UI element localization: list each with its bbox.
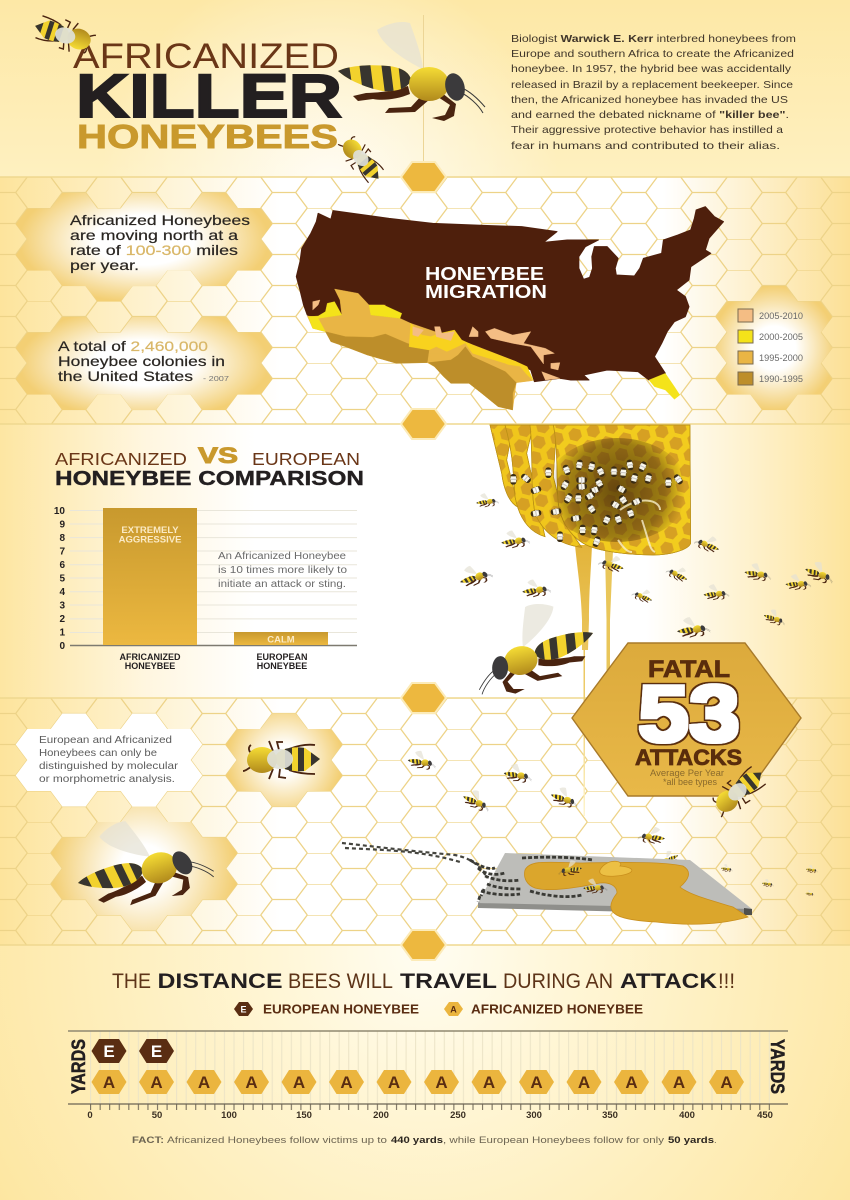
panel: distinguishing text: European and Africanized xyxy=(39,734,172,746)
icon: large bee near comb xyxy=(463,592,604,701)
intro paragraph: and earned the debated nickname of "killer bee" . xyxy=(511,109,789,121)
panel: migration rate callout xyxy=(16,193,272,302)
fact line: , while European Honeybees follow for only xyxy=(443,1135,664,1146)
swarm of small flying bees xyxy=(407,490,836,896)
chart: yards travelled: A xyxy=(625,1073,638,1092)
axis title right: YARDS xyxy=(766,1039,787,1094)
category labels: AFRICANIZED xyxy=(120,652,181,662)
intro paragraph: Biologist Warwick E. Kerr interbred honeybees from xyxy=(511,33,796,45)
intro paragraph: Their aggressive protective behavior has instilled a xyxy=(511,124,783,136)
map: honeybee migration xyxy=(296,207,723,410)
callout: fatal attacks hexagon: FATAL xyxy=(648,656,730,683)
intro paragraph: released in Brazil by a replacement beekeeper. Since xyxy=(511,79,793,91)
bar chart: aggression comparison: 6 xyxy=(59,560,65,571)
axis labels: 350 xyxy=(602,1110,618,1121)
fact line: 440 yards xyxy=(391,1135,443,1146)
category labels: HONEYBEE xyxy=(257,661,307,671)
chart: yards travelled: A xyxy=(245,1073,258,1092)
heading: distance bees travel: TRAVEL xyxy=(400,970,497,993)
chart: yards travelled: A xyxy=(388,1073,400,1092)
panel: colonies callout xyxy=(16,317,272,410)
heading: distance bees travel xyxy=(112,970,735,993)
icon: top-view bee above title xyxy=(30,11,98,58)
legend: bee types: E xyxy=(240,1004,247,1014)
map: honeybee migration: MIGRATION xyxy=(425,282,547,302)
heading: distance bees travel: DISTANCE xyxy=(158,970,282,993)
panel: top-view bee hexagon xyxy=(226,714,342,806)
chart: yards travelled: E xyxy=(151,1042,162,1061)
legend: bee types: A xyxy=(450,1004,457,1014)
heading: comparison: EUROPEAN xyxy=(252,449,360,469)
heading: distance bees travel: BEES WILL xyxy=(288,970,393,993)
legend: bee types: EUROPEAN HONEYBEE xyxy=(263,1002,419,1016)
heading: comparison: AFRICANIZED xyxy=(55,449,187,469)
map: honeybee migration: HONEYBEE xyxy=(425,264,544,284)
bar chart: aggression comparison: 8 xyxy=(59,533,65,544)
axis labels: 400 xyxy=(679,1110,695,1121)
panel: map legend: 2000-2005 xyxy=(759,332,803,342)
legend: bee types: AFRICANIZED HONEYBEE xyxy=(471,1002,643,1016)
illustration: honey drips xyxy=(575,545,613,816)
bar: Africanized xyxy=(103,508,197,645)
heading: distance bees travel: !!! xyxy=(718,970,735,993)
intro paragraph: then, the Africanized honeybee has invaded the US xyxy=(511,94,788,106)
illustration: bees trail to spilled honey on plate xyxy=(342,843,752,924)
title: HONEYBEES xyxy=(77,118,338,155)
chart: yards travelled: A xyxy=(483,1073,495,1092)
fact line: 50 yards xyxy=(668,1135,714,1146)
axis labels: 100 xyxy=(221,1110,237,1121)
bar annotation: An Africanized Honeybee xyxy=(218,551,346,562)
chart: yards travelled: A xyxy=(673,1073,685,1092)
chart: yards travelled xyxy=(68,1031,788,1121)
intro paragraph: honeybee. In 1957, the hybrid bee was accidentally xyxy=(511,63,792,75)
chart: yards travelled: A xyxy=(340,1073,353,1092)
bar chart: aggression comparison: 2 xyxy=(59,614,65,625)
chart: yards travelled: A xyxy=(578,1073,590,1092)
bar chart: aggression comparison: 9 xyxy=(59,520,65,530)
callout: fatal attacks hexagon: 53 xyxy=(638,669,740,758)
title xyxy=(73,37,342,155)
heading: distance bees travel: ATTACK xyxy=(620,970,717,993)
axis labels xyxy=(87,1110,773,1121)
callout: fatal attacks hexagon: *all bee types xyxy=(663,777,717,788)
axis labels: 250 xyxy=(450,1110,466,1121)
chart: yards travelled: A xyxy=(103,1073,115,1092)
callout: fatal attacks hexagon: ATTACKS xyxy=(635,745,742,770)
legend: bee types xyxy=(234,1002,643,1016)
gold hexagon markers on section dividers xyxy=(401,162,446,960)
intro paragraph xyxy=(511,33,796,152)
panel: side-view bee hexagon xyxy=(51,799,237,930)
fact line: Africanized Honeybees follow victims up to xyxy=(167,1135,387,1146)
icon: top-view bee on hexagon xyxy=(707,761,772,822)
intro paragraph: fear in humans and contributed to their alias. xyxy=(511,140,780,152)
panel: migration rate callout: Africanized Honeybees xyxy=(70,212,250,228)
heading: distance bees travel: DURING AN xyxy=(503,970,613,993)
bar value labels: AGGRESSIVE xyxy=(119,534,181,546)
chart: yards travelled: A xyxy=(435,1073,448,1092)
chart: yards travelled: A xyxy=(720,1073,733,1092)
bar chart: aggression comparison: 0 xyxy=(59,641,65,652)
bar annotation xyxy=(218,551,348,590)
heading: comparison: HONEYBEE COMPARISON xyxy=(55,467,364,490)
bar annotation: is 10 times more likely to xyxy=(218,565,348,576)
axis labels: 200 xyxy=(373,1110,389,1121)
category labels: HONEYBEE xyxy=(125,661,175,671)
panel: distinguishing text: or morphometric analysis. xyxy=(39,773,175,785)
bar chart: aggression comparison: 10 xyxy=(54,506,65,517)
axis title left: YARDS xyxy=(69,1039,90,1094)
icon: top-view bee under title xyxy=(334,131,388,188)
panel: migration rate callout: rate of 100-300 miles xyxy=(70,242,238,258)
callout: fatal attacks hexagon xyxy=(572,643,801,796)
fact line: FACT: xyxy=(132,1135,164,1146)
bar chart: aggression comparison: 1 xyxy=(59,628,65,638)
icon: large side-view bee by title xyxy=(336,22,485,121)
heading: comparison xyxy=(55,443,364,490)
panel: map legend: 1990-1995 xyxy=(759,374,803,384)
panel: migration rate callout: per year. xyxy=(70,257,139,273)
Africanized hexagon row xyxy=(92,1070,744,1094)
panel: distinguishing text: Honeybees can only be xyxy=(39,747,157,759)
category labels xyxy=(120,652,308,671)
axis labels: 300 xyxy=(526,1110,542,1121)
panel: map legend xyxy=(716,286,832,410)
axis labels: 150 xyxy=(296,1110,312,1121)
bar chart: aggression comparison: 4 xyxy=(59,587,65,598)
panel: map legend: 1995-2000 xyxy=(759,353,803,363)
axis labels: 0 xyxy=(87,1110,93,1121)
panel: map legend: 2005-2010 xyxy=(759,311,803,321)
bar chart: aggression comparison: 7 xyxy=(59,546,65,558)
heading: comparison: VS xyxy=(198,443,238,468)
panel: distinguishing text: distinguished by molecular xyxy=(39,760,179,772)
bar chart: aggression comparison: 3 xyxy=(59,600,65,612)
chart: yards travelled: A xyxy=(530,1073,543,1092)
bar chart: aggression comparison xyxy=(54,506,357,671)
European hexagon row xyxy=(92,1039,174,1063)
fact line: . xyxy=(714,1135,717,1146)
category labels: EUROPEAN xyxy=(256,652,308,662)
panel: colonies callout: - 2007 xyxy=(203,374,229,383)
callout: fatal attacks hexagon: Average Per Year xyxy=(650,768,724,779)
panel: colonies callout: the United States xyxy=(58,368,193,384)
title: KILLER xyxy=(76,62,342,130)
chart: yards travelled: A xyxy=(198,1073,210,1092)
intro paragraph: Europe and southern Africa to create the Africanized xyxy=(511,48,794,60)
heading: distance bees travel: THE xyxy=(112,970,151,993)
panel: colonies callout: A total of 2,460,000 xyxy=(58,338,208,354)
chart: yards travelled: A xyxy=(293,1073,305,1092)
illustration: honeycomb with bees xyxy=(490,425,691,555)
bar chart: aggression comparison: 5 xyxy=(59,574,65,584)
bar value labels: CALM xyxy=(267,634,295,646)
bar value labels xyxy=(119,525,295,646)
title: AFRICANIZED xyxy=(73,37,339,76)
chart: yards travelled: E xyxy=(103,1042,115,1061)
chart: yards travelled: A xyxy=(150,1073,163,1092)
panel: colonies callout: Honeybee colonies in xyxy=(58,353,225,369)
bar annotation: initiate an attack or sting. xyxy=(218,579,346,590)
panel: distinguishing text xyxy=(16,714,202,806)
panel: migration rate callout: are moving north at a xyxy=(70,227,238,243)
axis labels: 50 xyxy=(152,1110,162,1121)
bar value labels: EXTREMELY xyxy=(121,525,179,536)
axis labels: 450 xyxy=(757,1110,773,1121)
bar: European xyxy=(234,632,328,645)
